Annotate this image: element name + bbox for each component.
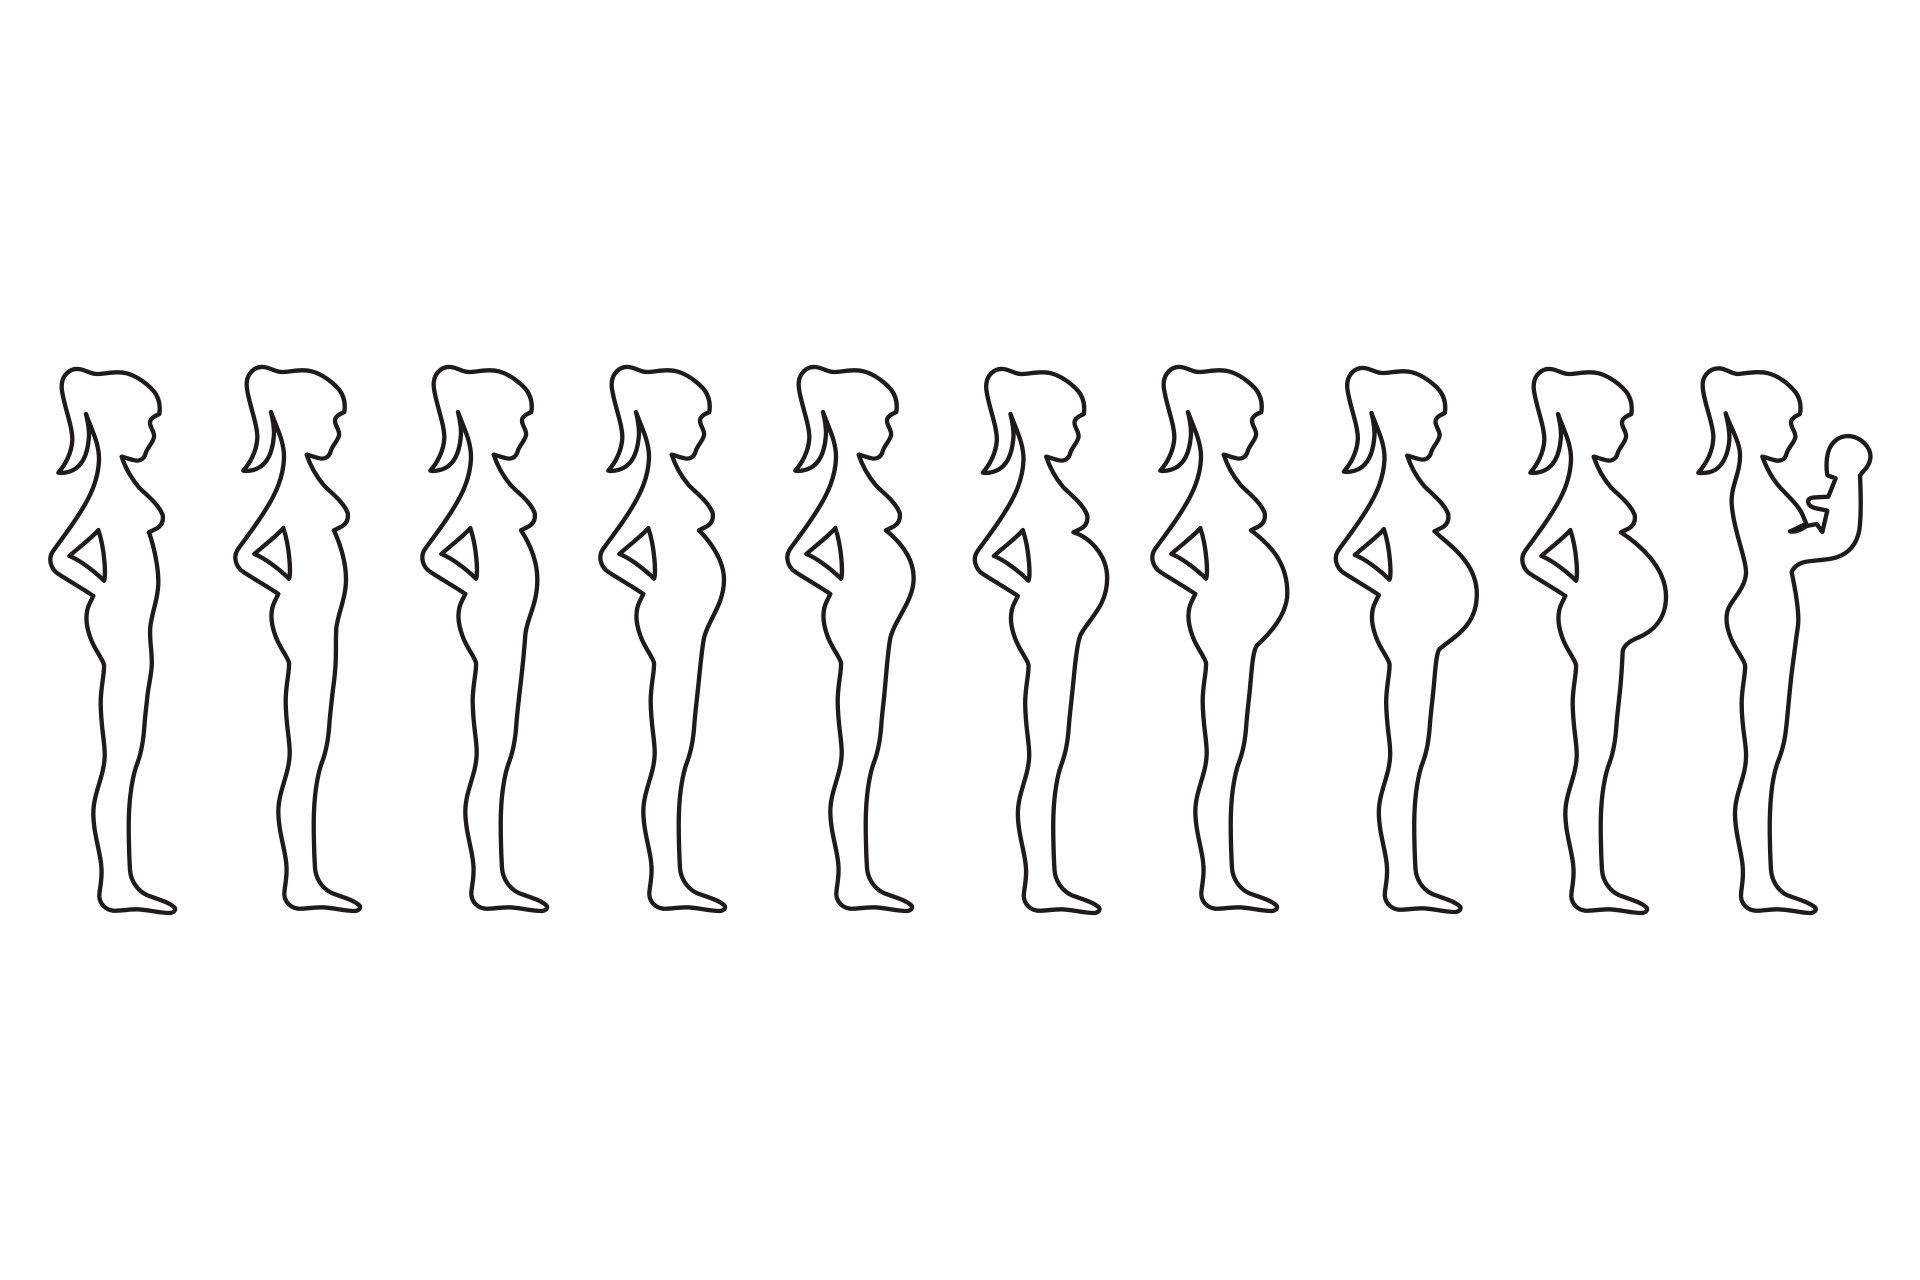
figure 10: mother holding baby [1698, 368, 1870, 913]
figure 7: month 7 [1152, 367, 1287, 911]
figure 4: month 4 [600, 367, 725, 911]
figure 9: month 9 [1522, 369, 1666, 913]
figure 3: month 3 [422, 367, 547, 911]
figure 5: month 5 [787, 367, 914, 911]
figure 1: before pregnancy [50, 369, 175, 913]
figure 2: month 2 [235, 367, 360, 911]
figure 6: month 6 [975, 369, 1107, 913]
figure 8: month 8 [1336, 368, 1477, 912]
